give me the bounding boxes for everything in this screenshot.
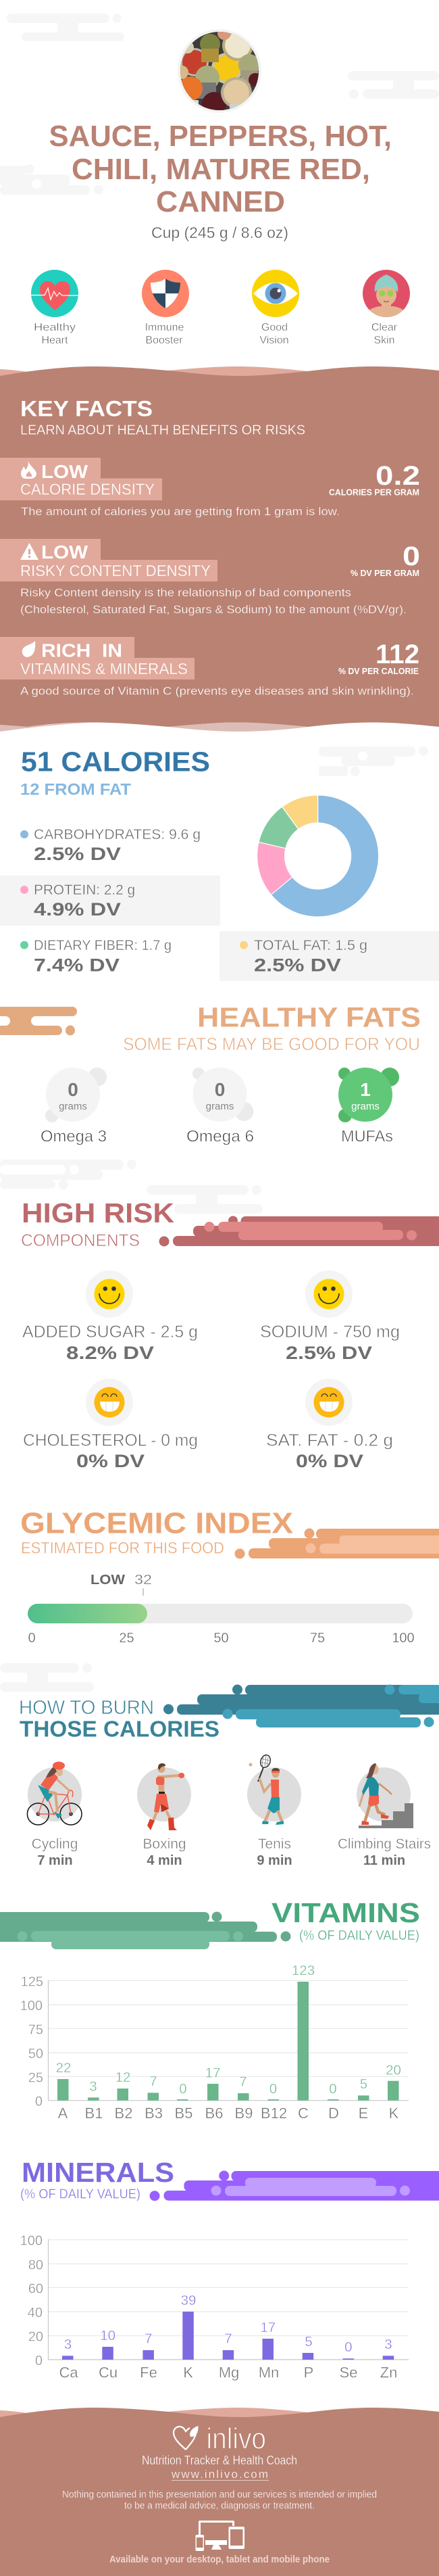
item: sodium [260,1270,400,1363]
gauge: glycemic score: 25 [119,1631,134,1646]
bar chart: vitamins: A [58,2105,68,2122]
decorative brush: healthy fats [0,1007,77,1036]
heading: how to burn those calories: THOSE CALORIES [20,1716,220,1742]
decorative brush: high risk [159,1216,439,1247]
heading: key facts: LEARN ABOUT HEALTH BENEFITS OR RISKS [20,423,305,438]
item: cholesterol [23,1379,198,1471]
bar chart: vitamins: 3 [89,2078,97,2094]
benefits row [31,270,410,346]
panel: vitamins [0,1897,420,2122]
fact: low calorie density: The amount of calories you are getting from 1 gram is low. [21,505,340,518]
gauge: glycemic score: 32 [134,1573,152,1588]
bar chart: minerals: Mn [259,2364,279,2381]
label: immune booster: Immune [145,322,184,333]
stat: omega 6: Omega 6 [186,1128,254,1146]
panel: healthy fats [0,1002,421,1146]
activity: boxing [137,1763,191,1830]
bar chart: minerals: Ca [59,2364,78,2381]
bar chart: vitamins: B5 [175,2105,192,2122]
activity: climbing stairs [357,1763,413,1828]
fact: low risky content density [0,539,420,616]
heading: healthy fats: HEALTHY FATS [197,1002,421,1033]
gauge: glycemic score [28,1573,415,1646]
stat: mufas [338,1068,399,1146]
bar chart: minerals: Se [340,2364,357,2381]
fact: low risky content density: RISKY CONTENT DENSITY [20,562,211,579]
bar chart: vitamins: 0 [269,2081,277,2097]
subheading: percent of daily value: (% OF DAILY VALUE) [20,2187,140,2202]
bar chart: vitamins: B1 [85,2105,103,2122]
bar chart: vitamins: B2 [115,2105,132,2122]
bar chart: minerals: 10 [100,2328,115,2343]
bar chart: vitamins: B9 [235,2105,253,2122]
bar chart: vitamins: 0 [329,2081,337,2097]
legend: dietary fiber: 7.4% DV [34,955,120,976]
website link: www.inlivo.com [171,2468,268,2481]
icon: leaf [22,641,35,657]
item: sodium: 2.5% DV [286,1343,372,1363]
bar chart: vitamins: 0 [35,2095,43,2109]
bar chart: vitamins: 7 [149,2074,157,2089]
gauge: glycemic score: 50 [213,1631,229,1646]
legend: carbohydrates [20,827,201,864]
decorative brush: glycemic [235,1528,439,1559]
stat: omega 6: grams [206,1101,234,1112]
title: SAUCE, PEPPERS, HOT, [49,120,392,153]
disclaimer: to be a medical advice, diagnosis or treatment. [124,2500,315,2512]
stat: mufas: grams [351,1101,380,1112]
fact: rich in vitamins and minerals: A good source of Vitamin C (prevents eye diseases and skin wrinkling). [20,684,414,698]
bar chart: vitamins: B6 [205,2105,223,2122]
item: cholesterol: 0% DV [76,1451,145,1471]
serving size: Cup (245 g / 8.6 oz) [151,224,288,241]
panel: how to burn [19,1685,439,1868]
panel: calories [0,746,439,981]
panel: key facts [0,366,439,732]
bar chart: vitamins: 50 [28,2047,43,2061]
item: saturated fat: SAT. FAT - 0.2 g [266,1431,393,1450]
legend: total fat: TOTAL FAT: 1.5 g [254,938,367,953]
logo: inlivo: inlivo [207,2423,266,2456]
label: climbing stairs: Climbing Stairs [338,1836,431,1852]
stat: mufas: 1 [360,1079,371,1100]
bar chart: minerals: 3 [64,2337,72,2352]
item: sodium: SODIUM - 750 mg [260,1322,400,1341]
legend: protein: 4.9% DV [34,899,121,920]
decorative brush: minerals [150,2170,439,2201]
title: CANNED [156,185,285,218]
label: healthy heart [34,322,76,346]
fact: low calorie density [0,458,420,518]
bar chart: minerals: 100 [20,2234,43,2249]
bar chart: minerals: 7 [145,2331,152,2347]
icon: good vision eye [252,270,299,317]
label: clear skin: Clear [371,322,398,333]
donut chart [257,795,379,917]
label: tenis [257,1836,292,1868]
bar chart: minerals: 17 [260,2320,276,2335]
label: healthy heart: Heart [41,335,68,346]
label: climbing stairs [338,1836,431,1868]
fact: rich in vitamins and minerals [0,637,419,698]
bar chart: minerals: 39 [181,2293,196,2308]
bar chart: vitamins: E [359,2105,368,2122]
bar chart: vitamins: 0 [179,2081,187,2097]
bar chart: vitamins: B12 [261,2105,287,2122]
legend: carbohydrates: 2.5% DV [34,844,121,864]
heading: how to burn those calories: HOW TO BURN [19,1697,154,1719]
bar chart: minerals: Mg [219,2364,239,2381]
label: tenis: 9 min [257,1853,292,1868]
bar chart: minerals: 60 [28,2281,43,2296]
bar chart: minerals: P [304,2364,313,2381]
label: cycling [32,1836,78,1868]
legend: dietary fiber [20,938,172,976]
bar chart: minerals: 7 [224,2331,232,2347]
bar chart: vitamins: 75 [28,2022,43,2037]
gauge: glycemic score: LOW [91,1573,125,1588]
bar chart: minerals: Fe [140,2364,157,2381]
item: added sugar: ADDED SUGAR - 2.5 g [22,1322,198,1341]
availability note: Available on your desktop, tablet and mobile phone [109,2554,330,2565]
bar chart: minerals: 20 [28,2330,43,2345]
decorative brush: vitamins [0,1912,290,1949]
icon: warning triangle [20,543,38,560]
fact: rich in vitamins and minerals: 112 [376,640,419,669]
legend: total fat [220,931,439,981]
bar chart: vitamins: 17 [205,2065,220,2080]
icon: clear skin [363,270,410,318]
heading: glycemic index: GLYCEMIC INDEX [20,1506,293,1540]
heading: key facts [20,397,305,438]
icon: healthy heart [31,270,78,317]
label: immune booster: Booster [145,335,183,346]
bar chart: vitamins: 25 [28,2070,43,2085]
label: boxing [143,1836,186,1868]
label: cycling: 7 min [37,1853,73,1868]
legend: protein [0,876,220,926]
gauge: glycemic score: 75 [310,1631,325,1646]
logo: inlivo [174,2423,266,2456]
title: CHILI, MATURE RED, [72,153,370,186]
bar chart: vitamins: K [389,2105,399,2122]
bar chart: vitamins: 125 [21,1974,43,1989]
bar chart: vitamins: B3 [145,2105,163,2122]
label: clear skin [371,322,398,346]
subheading: 12 from fat: 12 FROM FAT [20,781,131,799]
heading: how to burn those calories [19,1697,220,1742]
bar chart: vitamins: 123 [292,1963,315,1978]
label: immune booster [145,322,184,346]
bar chart: vitamins: 5 [360,2076,367,2092]
stat: omega 3 [41,1068,107,1146]
panel: glycemic index [20,1506,439,1646]
label: boxing: 4 min [147,1853,182,1868]
bar chart: vitamins [20,1963,409,2122]
gauge: glycemic score: 100 [392,1631,415,1646]
heading: 51 calories: 51 CALORIES [21,746,210,778]
bar chart: minerals: K [183,2364,193,2381]
icon: devices [196,2521,244,2551]
heading: vitamins: VITAMINS [272,1897,420,1928]
activity: tennis [247,1754,301,1825]
stat: omega 3: grams [59,1101,87,1112]
panel: footer [0,2408,439,2576]
label: good vision: Vision [259,335,289,346]
bar chart: minerals: 5 [305,2334,313,2350]
label: healthy heart: Healthy [34,322,76,333]
label: clear skin: Skin [373,335,395,346]
fact: low risky content density: % DV PER GRAM [351,569,419,578]
gauge: glycemic score: 0 [28,1631,36,1646]
fact: rich in vitamins and minerals: % DV PER CALORIE [338,667,419,676]
legend: protein: PROTEIN: 2.2 g [34,882,135,898]
bar chart: vitamins: 12 [115,2070,130,2085]
fact: low calorie density: CALORIES PER GRAM [329,487,419,497]
stat: mufas: MUFAs [341,1128,393,1146]
bar chart: minerals: 3 [384,2337,392,2352]
label: climbing stairs: 11 min [363,1853,405,1868]
food photo: canned food [178,29,261,113]
legend: total fat: 2.5% DV [254,955,341,976]
bar chart: minerals: 0 [35,2354,43,2368]
activity: cycling [27,1762,82,1825]
stat: omega 6: 0 [215,1079,225,1100]
panel: minerals [20,2157,439,2381]
item: cholesterol: CHOLESTEROL - 0 mg [23,1431,198,1450]
panel: high risk [21,1197,439,1471]
label: good vision [259,322,289,346]
disclaimer: Nothing contained in this presentation and our services is intended or implied [62,2489,377,2500]
icon: flame [21,461,36,479]
legend: dietary fiber: DIETARY FIBER: 1.7 g [34,938,172,953]
title [49,120,392,218]
item: added sugar: 8.2% DV [66,1343,154,1363]
legend: carbohydrates: CARBOHYDRATES: 9.6 g [34,827,201,842]
fact: low risky content density: Risky Content density is the relationship of bad components [20,586,351,599]
decorative brush: burn [163,1685,439,1727]
bar chart: vitamins: 100 [20,1999,43,2013]
stat: omega 3: 0 [68,1079,78,1100]
heading: high risk: HIGH RISK [22,1197,174,1229]
fact: rich in vitamins and minerals: RICH IN [41,640,122,661]
heading: key facts: KEY FACTS [20,397,153,421]
fact: low calorie density: 0.2 [376,461,420,491]
subheading: components: COMPONENTS [21,1231,140,1250]
bar chart: minerals [20,2234,409,2381]
label: good vision: Good [261,322,288,333]
label: boxing: Boxing [143,1836,186,1852]
label: tenis: Tenis [258,1836,291,1852]
bar chart: minerals: 0 [344,2339,353,2355]
stat: omega 3: Omega 3 [41,1128,107,1146]
bar chart: minerals: Zn [380,2364,397,2381]
fact: low calorie density: LOW [41,461,88,482]
bar chart: vitamins: 7 [239,2074,247,2090]
bar chart: vitamins: D [328,2105,339,2122]
tagline: Nutrition Tracker & Health Coach [142,2454,297,2467]
fact: low calorie density: CALORIE DENSITY [20,481,155,498]
bar chart: minerals: 40 [28,2306,43,2320]
fact: rich in vitamins and minerals: VITAMINS & MINERALS [20,660,188,677]
bar chart: vitamins: 20 [386,2062,401,2078]
bar chart: vitamins: 22 [56,2060,71,2076]
bar chart: minerals: Cu [99,2364,118,2381]
stat: omega 6 [186,1068,254,1146]
item: saturated fat: 0% DV [296,1451,363,1471]
heading: minerals: MINERALS [22,2157,174,2188]
fact: low risky content density: LOW [41,542,88,563]
icon: immune booster shield [142,270,189,317]
item: saturated fat [266,1379,393,1471]
fact: low risky content density: (Cholesterol, Saturated Fat, Sugars & Sodium) to the amount (%DV/gr). [20,603,407,616]
fact: low risky content density: 0 [403,542,420,571]
subheading: some fats: SOME FATS MAY BE GOOD FOR YOU [123,1034,420,1054]
bar chart: minerals: 80 [28,2258,43,2272]
bar chart: vitamins: C [298,2105,309,2122]
subheading: percent of daily value: (% OF DAILY VALUE) [299,1928,419,1943]
disclaimer [62,2489,377,2512]
item: added sugar [22,1270,198,1363]
label: cycling: Cycling [32,1836,78,1852]
subheading: estimated: ESTIMATED FOR THIS FOOD [21,1540,224,1558]
